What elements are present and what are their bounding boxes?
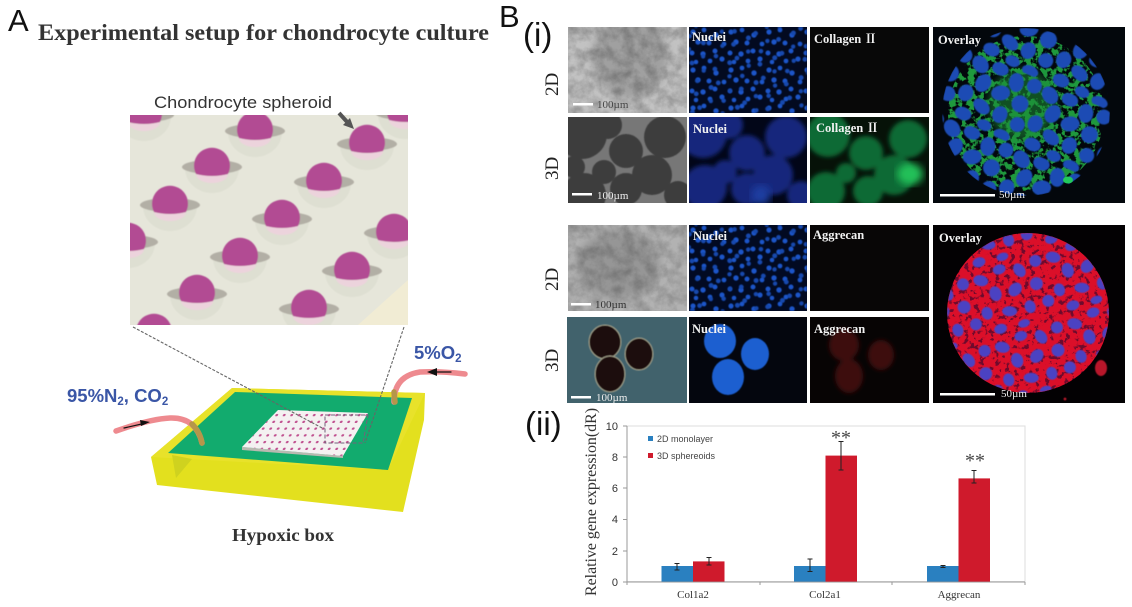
x-axis labels: Aggrecan (938, 589, 981, 601)
title: experimental setup: Experimental setup for chondrocyte culture (38, 20, 489, 45)
micrograph: collagen 2D nuclei (689, 27, 807, 113)
micrograph: aggrecan 3D phase (567, 317, 687, 404)
row labels (542, 73, 563, 372)
legend: 3D sphereoids (657, 451, 716, 461)
micrograph: collagen 2D nuclei: Nuclei (692, 30, 727, 44)
micrograph: collagen 2D stain (810, 27, 929, 113)
label: chondrocyte spheroid: Chondrocyte spheroid (154, 94, 332, 112)
3D spheroid bars (693, 456, 990, 582)
panel label (i): (i) (523, 16, 552, 53)
legend: 2D monolayer (657, 434, 713, 444)
box body (151, 388, 425, 512)
label: 95% N2, CO2: 95%N (67, 385, 117, 406)
significance stars: ** (831, 427, 851, 449)
micrograph: aggrecan 3D nuclei (689, 317, 807, 403)
micrograph: collagen 3D nuclei: Nuclei (693, 122, 728, 136)
label: 5% O2: 5%O (414, 342, 455, 363)
y-axis tick labels: 4 (612, 514, 618, 526)
x-axis labels: Col2a1 (809, 589, 841, 601)
y-axis tick labels: 0 (612, 577, 618, 589)
bar chart: relative gene expression (583, 408, 1025, 601)
chip with microwell array (242, 410, 368, 458)
micrograph: collagen 3D phase: 100µm (597, 190, 629, 202)
y-axis tick labels: 10 (606, 421, 618, 433)
micrograph: aggrecan 3D stain: Aggrecan (814, 322, 865, 336)
label: 95% N2, CO2: 2 (162, 396, 168, 408)
micrograph: aggrecan 3D stain (810, 317, 929, 403)
legend (648, 434, 716, 461)
inlet tube: left (116, 418, 202, 443)
micrograph: aggrecan overlay (933, 225, 1125, 403)
micrograph: collagen 3D phase (568, 117, 687, 203)
micrograph: collagen 3D stain: Collagen Ⅱ (816, 121, 879, 135)
micrograph: aggrecan 2D stain: Aggrecan (813, 228, 864, 242)
micrograph: aggrecan overlay: Overlay (939, 231, 983, 245)
row labels: 2D (542, 73, 563, 96)
spheroids in wells (130, 115, 408, 325)
diagram: hypoxic box (151, 388, 425, 512)
micrograph: collagen 2D phase: 100µm (597, 99, 629, 111)
y-axis tick labels (606, 421, 618, 589)
row labels: 2D (542, 268, 563, 291)
micrograph: collagen 3D stain (810, 117, 929, 203)
micrograph: collagen 2D stain: Collagen Ⅱ (814, 32, 877, 46)
panel label B: B (499, 0, 520, 34)
micrograph: collagen overlay (933, 27, 1125, 203)
micrograph: aggrecan 3D nuclei: Nuclei (692, 322, 727, 336)
micrograph: collagen 3D nuclei (689, 117, 807, 203)
dashed zoom lines (133, 327, 404, 443)
micrograph: aggrecan 3D phase: 100µm (596, 392, 628, 404)
arrow: to spheroid (339, 113, 354, 129)
error bars (674, 442, 976, 572)
y-axis title: Relative gene expression(dR) (583, 408, 600, 596)
row labels: 3D (542, 349, 563, 372)
dashed zoom region (325, 415, 368, 443)
x-axis labels: Col1a2 (677, 589, 709, 601)
micrograph: aggrecan 2D nuclei (689, 225, 807, 311)
y-axis tick labels: 8 (612, 452, 618, 464)
green culture floor (168, 392, 412, 470)
micrograph: aggrecan 2D stain (810, 225, 929, 311)
panel label A: A (8, 3, 29, 38)
label: 95% N2, CO2: , CO (124, 385, 162, 406)
plot frame (627, 426, 1025, 582)
label: 5% O2: 2 (455, 353, 462, 365)
panel: microwell close-up (130, 115, 408, 325)
caption: hypoxic box: Hypoxic box (232, 525, 334, 545)
micrograph: aggrecan 2D phase (568, 225, 687, 311)
axes and ticks (623, 426, 1025, 585)
2D monolayer bars (662, 566, 958, 582)
micrograph: collagen overlay: 50µm (999, 189, 1025, 201)
significance stars (831, 427, 985, 472)
outlet tube: right (394, 368, 465, 402)
micrograph: aggrecan 2D nuclei: Nuclei (693, 229, 728, 243)
micrograph: aggrecan overlay: 50µm (1001, 388, 1027, 400)
micrograph: collagen 2D phase (568, 27, 687, 113)
x-axis labels (677, 589, 981, 601)
micrograph: collagen overlay: Overlay (938, 33, 982, 47)
row labels: 3D (542, 157, 563, 180)
panel label (ii): (ii) (525, 405, 562, 442)
label: 95% N2, CO2: 2 (117, 396, 124, 408)
significance stars: ** (965, 450, 985, 472)
y-axis tick labels: 6 (612, 483, 618, 495)
micrograph: aggrecan 2D phase: 100µm (595, 299, 627, 311)
y-axis tick labels: 2 (612, 546, 618, 558)
